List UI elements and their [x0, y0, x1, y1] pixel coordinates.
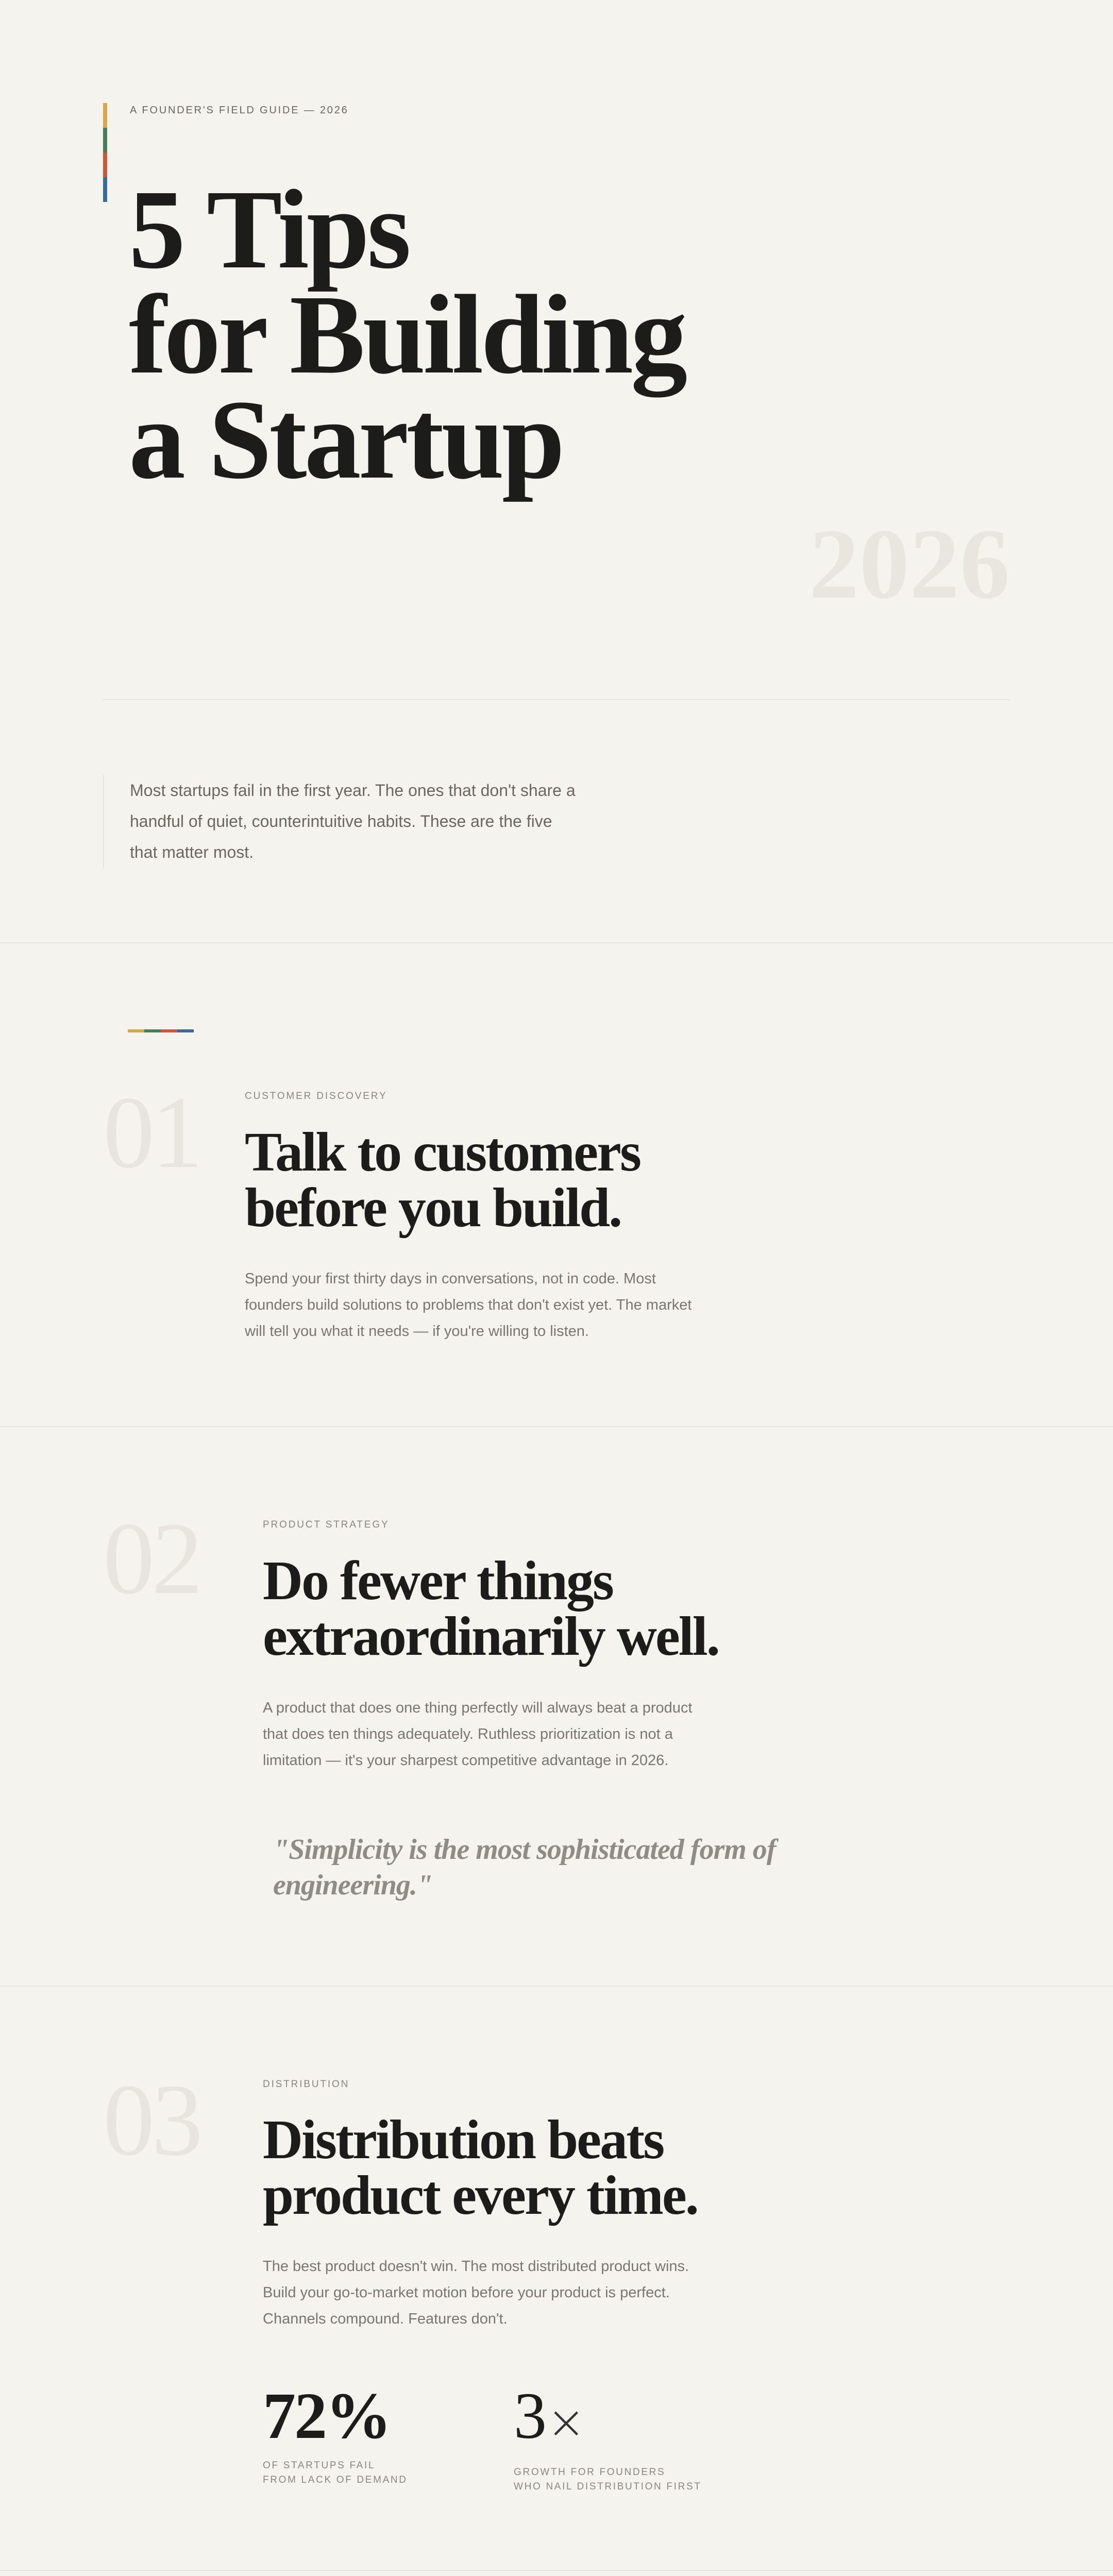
- intro paragraph: [103, 775, 576, 868]
- numeral 03: 03: [103, 2063, 200, 2177]
- title: for Building: [129, 272, 685, 397]
- heading: Distribution beats: [263, 2109, 663, 2171]
- eyebrow: field guide: A FOUNDER'S FIELD GUIDE — 2026: [130, 105, 349, 116]
- body text: will tell you what it needs — if you're willing to listen.: [245, 1323, 589, 1340]
- body text: founders build solutions to problems that don't exist yet. The market: [245, 1297, 692, 1313]
- heading: product every time.: [263, 2165, 698, 2226]
- heading: Talk to customers: [245, 1122, 640, 1183]
- panel: tip 03: [103, 2063, 702, 2492]
- color bar: section accent: [128, 1029, 194, 1032]
- pull quote: "Simplicity is the most sophisticated form of: [273, 1834, 775, 1866]
- stat: 72%: OF STARTUPS FAIL: [263, 2460, 375, 2471]
- body text: that does ten things adequately. Ruthless prioritization is not a: [263, 1726, 673, 1742]
- heading: [263, 1550, 719, 1667]
- title: 5 Tips: [129, 166, 409, 292]
- eyebrow: DISTRIBUTION: [263, 2079, 349, 2090]
- heading: extraordinarily well.: [263, 1606, 719, 1667]
- intro paragraph: handful of quiet, counterintuitive habits. These are the five: [130, 812, 552, 831]
- stat: 3x: 3×: [514, 2379, 585, 2452]
- numeral 02: 02: [103, 1502, 200, 1616]
- eyebrow: CUSTOMER DISCOVERY: [245, 1091, 387, 1101]
- intro paragraph: that matter most.: [130, 843, 254, 861]
- pull quote: [273, 1834, 779, 1901]
- numeral 01: 01: [103, 1076, 200, 1190]
- body text: A product that does one thing perfectly will always beat a product: [263, 1700, 692, 1716]
- heading: Do fewer things: [263, 1550, 613, 1612]
- body text: [245, 1270, 692, 1340]
- body text: The best product doesn't win. The most distributed product wins.: [263, 2258, 689, 2275]
- body text: [263, 1700, 693, 1769]
- stat: 72%: [263, 2379, 408, 2485]
- title: [129, 166, 686, 502]
- ghost year: 2026: [809, 509, 1010, 620]
- heading: [245, 1122, 640, 1239]
- body text: limitation — it's your sharpest competitive advantage in 2026.: [263, 1752, 668, 1769]
- panel: tip 04: [0, 2571, 1113, 2576]
- title: a Startup: [129, 377, 562, 502]
- color bar: header accent: [103, 103, 107, 202]
- panel: tip 03: WHO NAIL DISTRIBUTION FIRST: [514, 2481, 702, 2492]
- stat: 72%: 72%: [263, 2379, 390, 2452]
- body text: Spend your first thirty days in conversations, not in code. Most: [245, 1270, 656, 1287]
- stat: 3x: GROWTH FOR FOUNDERS: [514, 2467, 665, 2478]
- eyebrow: PRODUCT STRATEGY: [263, 1519, 389, 1530]
- body text: Channels compound. Features don't.: [263, 2311, 508, 2327]
- body text: [263, 2258, 689, 2327]
- heading: before you build.: [245, 1177, 621, 1239]
- stat: 3x: [514, 2379, 702, 2492]
- intro paragraph: Most startups fail in the first year. The ones that don't share a: [130, 781, 576, 800]
- stat: 72%: FROM LACK OF DEMAND: [263, 2475, 408, 2485]
- panel: tip 02: [103, 1502, 779, 1901]
- pull quote: engineering.": [273, 1869, 432, 1901]
- body text: Build your go-to-market motion before your product is perfect.: [263, 2284, 670, 2301]
- heading: [263, 2109, 698, 2226]
- panel: tip 01: [103, 1029, 692, 1340]
